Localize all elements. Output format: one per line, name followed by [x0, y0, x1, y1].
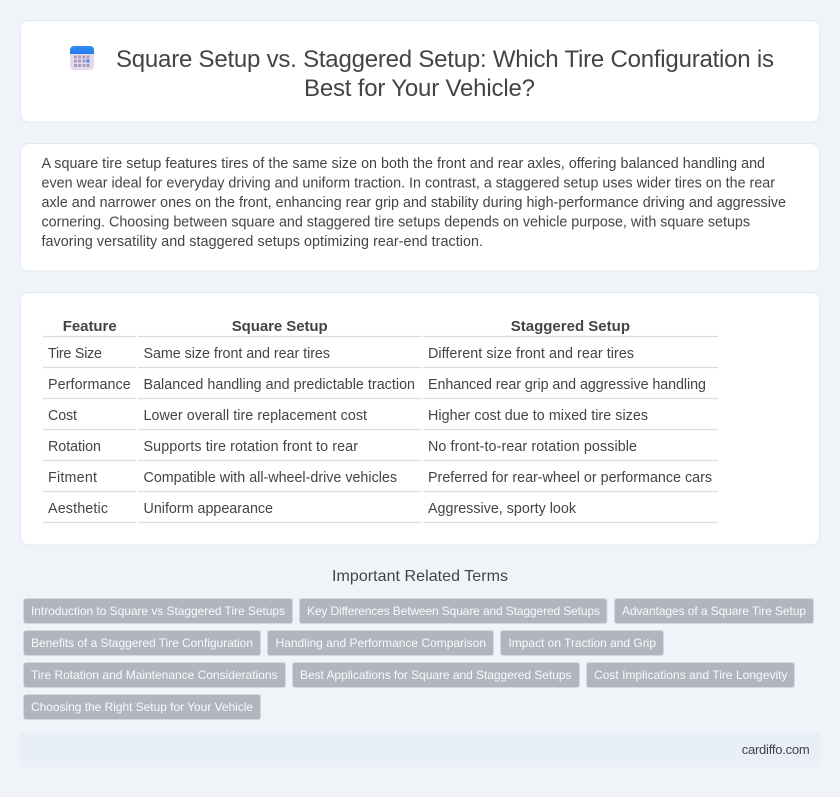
- table header row: Feature: [63, 318, 117, 335]
- tag: [268, 630, 494, 656]
- table row: rotation: [48, 439, 637, 455]
- table row: performance: Enhanced rear grip and aggressive handling: [428, 377, 706, 393]
- text block: description: cornering. Choosing between square and staggered tire setups depends on vehicle purpose, with square setups: [42, 214, 750, 230]
- table row: aesthetic: Aggressive, sporty look: [428, 501, 577, 517]
- table row: performance: [48, 377, 706, 393]
- table row: fitment: Fitment: [48, 470, 97, 486]
- table header row: Square Setup: [232, 318, 328, 335]
- table row: tire size: Tire Size: [48, 346, 102, 362]
- panel: intro paragraph: [20, 144, 820, 271]
- footer: cardiffo.com: [742, 742, 810, 757]
- panel: comparison table: [20, 292, 820, 545]
- table header row: Staggered Setup: [511, 318, 630, 335]
- footer: [20, 733, 820, 767]
- table row: rotation: No front-to-rear rotation possible: [428, 439, 637, 455]
- text block: description: A square tire setup features tires of the same size on both the front and rear axles, offering balanced handling and: [42, 156, 765, 172]
- tag: [614, 598, 814, 624]
- tag: Advantages of a Square Tire Setup: [622, 604, 806, 618]
- tag: Impact on Traction and Grip: [508, 636, 656, 650]
- text block: description: favoring versatility and staggered setups optimizing rear-end traction.: [42, 234, 483, 250]
- title: Square Setup vs. Staggered Setup: Which Tire Configuration is: [116, 46, 774, 73]
- title: [116, 46, 774, 102]
- table row: tire size: [48, 346, 634, 362]
- tag: Cost Implications and Tire Longevity: [594, 668, 788, 682]
- table row: performance: Performance: [48, 377, 131, 393]
- tag: [500, 630, 664, 656]
- tag: Handling and Performance Comparison: [276, 636, 486, 650]
- tag: [24, 662, 286, 688]
- table row: fitment: Compatible with all-wheel-drive vehicles: [144, 470, 397, 486]
- table row: rotation: Rotation: [48, 439, 101, 455]
- table row: tire size: Different size front and rear tires: [428, 346, 634, 362]
- tag: Benefits of a Staggered Tire Configuration: [31, 636, 253, 650]
- text block: description: [42, 156, 786, 250]
- table row: aesthetic: Uniform appearance: [144, 501, 273, 517]
- tag: [24, 630, 260, 656]
- text block: description: axle and narrower ones on the front, enhancing rear grip and stability during high-performance driving and aggressive: [42, 195, 786, 211]
- table row: rotation: Supports tire rotation front to rear: [144, 439, 358, 455]
- table row: aesthetic: Aesthetic: [48, 501, 108, 517]
- table row: cost: Lower overall tire replacement cost: [144, 408, 367, 424]
- text block: description: even wear ideal for everyday driving and uniform traction. In contrast, a staggered setup uses wider tires on the rear: [42, 176, 775, 192]
- table row: aesthetic: [48, 501, 577, 517]
- tag: [300, 598, 607, 624]
- tag: Tire Rotation and Maintenance Considerations: [31, 668, 278, 682]
- table row: cost: Cost: [48, 408, 77, 424]
- tag: Best Applications for Square and Staggered Setups: [300, 668, 572, 682]
- panel: header: [20, 20, 820, 122]
- table row: cost: Higher cost due to mixed tire sizes: [428, 408, 648, 424]
- table row: performance: Balanced handling and predictable traction: [144, 377, 415, 393]
- tag: Key Differences Between Square and Staggered Setups: [307, 604, 600, 618]
- tag: Choosing the Right Setup for Your Vehicle: [31, 700, 253, 714]
- tag: [292, 662, 580, 688]
- tag: Introduction to Square vs Staggered Tire Setups: [31, 604, 285, 618]
- panel: related term tags: [24, 598, 814, 720]
- table row: fitment: [48, 470, 712, 486]
- icon: calendar: [70, 46, 94, 70]
- table row: cost: [48, 408, 648, 424]
- table row: fitment: Preferred for rear-wheel or performance cars: [428, 470, 712, 486]
- tag: [24, 598, 292, 624]
- title: Best for Your Vehicle?: [304, 75, 535, 102]
- tag: [24, 694, 260, 720]
- table header row: [63, 318, 630, 335]
- tag: [586, 662, 794, 688]
- table row: tire size: Same size front and rear tires: [144, 346, 330, 362]
- heading: important related terms: Important Related Terms: [332, 568, 508, 585]
